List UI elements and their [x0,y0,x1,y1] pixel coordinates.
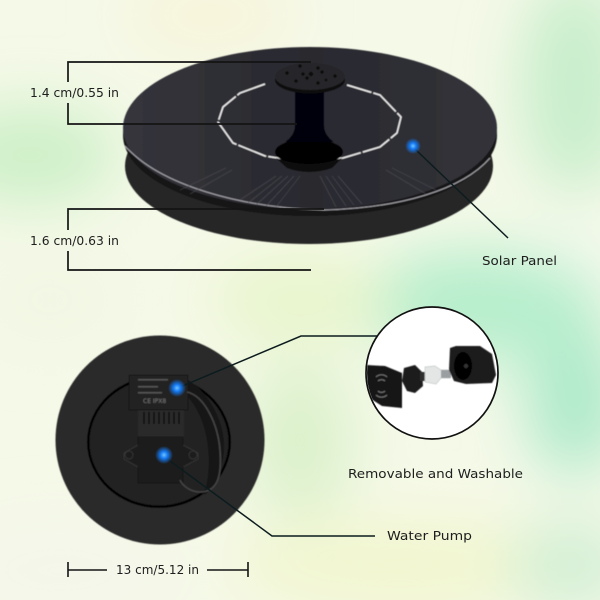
filter cover [366,365,402,408]
pump screw ears [124,445,198,467]
label: 1.6 cm/0.63 in: 1.6 cm/0.63 in [30,233,119,248]
dashed ring [218,84,401,162]
pump vents [144,412,179,424]
pump body [449,346,496,384]
foam ring [56,336,264,544]
nozzle holes [285,64,337,85]
dark pocket behind cable [188,380,224,495]
circle background [366,307,498,439]
label plate lines [138,379,168,394]
metal shaft [441,370,451,378]
fountain underside [56,336,264,544]
pump cable [180,392,220,492]
filter grille [376,375,387,397]
connector stub [420,371,426,382]
nozzle base [275,139,343,165]
inner recess edge [87,376,231,508]
label plate [129,375,188,410]
callout line: water pump [166,458,375,536]
nozzle base hatch [276,158,342,172]
clear impeller [425,366,450,384]
callout line: solar panel [415,149,508,238]
label: removable and washable: Removable and Washable [348,466,523,481]
width dimension [68,562,248,577]
nozzle cap underside [275,66,345,94]
label: solar panel: Solar Panel [482,253,557,268]
label: water pump: Water Pump [387,528,472,543]
blue marker: solar panel [405,138,421,154]
blue marker: pump [155,446,173,464]
inlet pin [464,364,468,368]
label: 13 cm/5.12 in: 13 cm/5.12 in [116,562,199,577]
foam base [125,88,493,244]
panel surface [123,47,497,209]
panel rim [123,54,497,216]
plate marks: CE IPX8 [143,398,166,405]
pump lower body [138,437,183,483]
rim highlight [125,146,490,210]
label: 1.4 cm/0.55 in: 1.4 cm/0.55 in [30,85,119,100]
impeller housing [402,365,423,393]
detail circle: disassembled pump [366,307,498,439]
measurement bracket: 1.4 cm [68,62,311,124]
solar cell streaks [180,168,436,207]
measurement bracket: 1.6 cm [68,209,324,270]
inner recess [90,378,228,506]
pump inlet [454,352,472,380]
pump upper body [138,410,184,438]
callout line: removable part [180,336,378,387]
nozzle cap top [275,63,345,90]
solar fountain: top view product [123,47,497,244]
blue marker: label plate [168,379,186,397]
nozzle stem [285,88,334,142]
